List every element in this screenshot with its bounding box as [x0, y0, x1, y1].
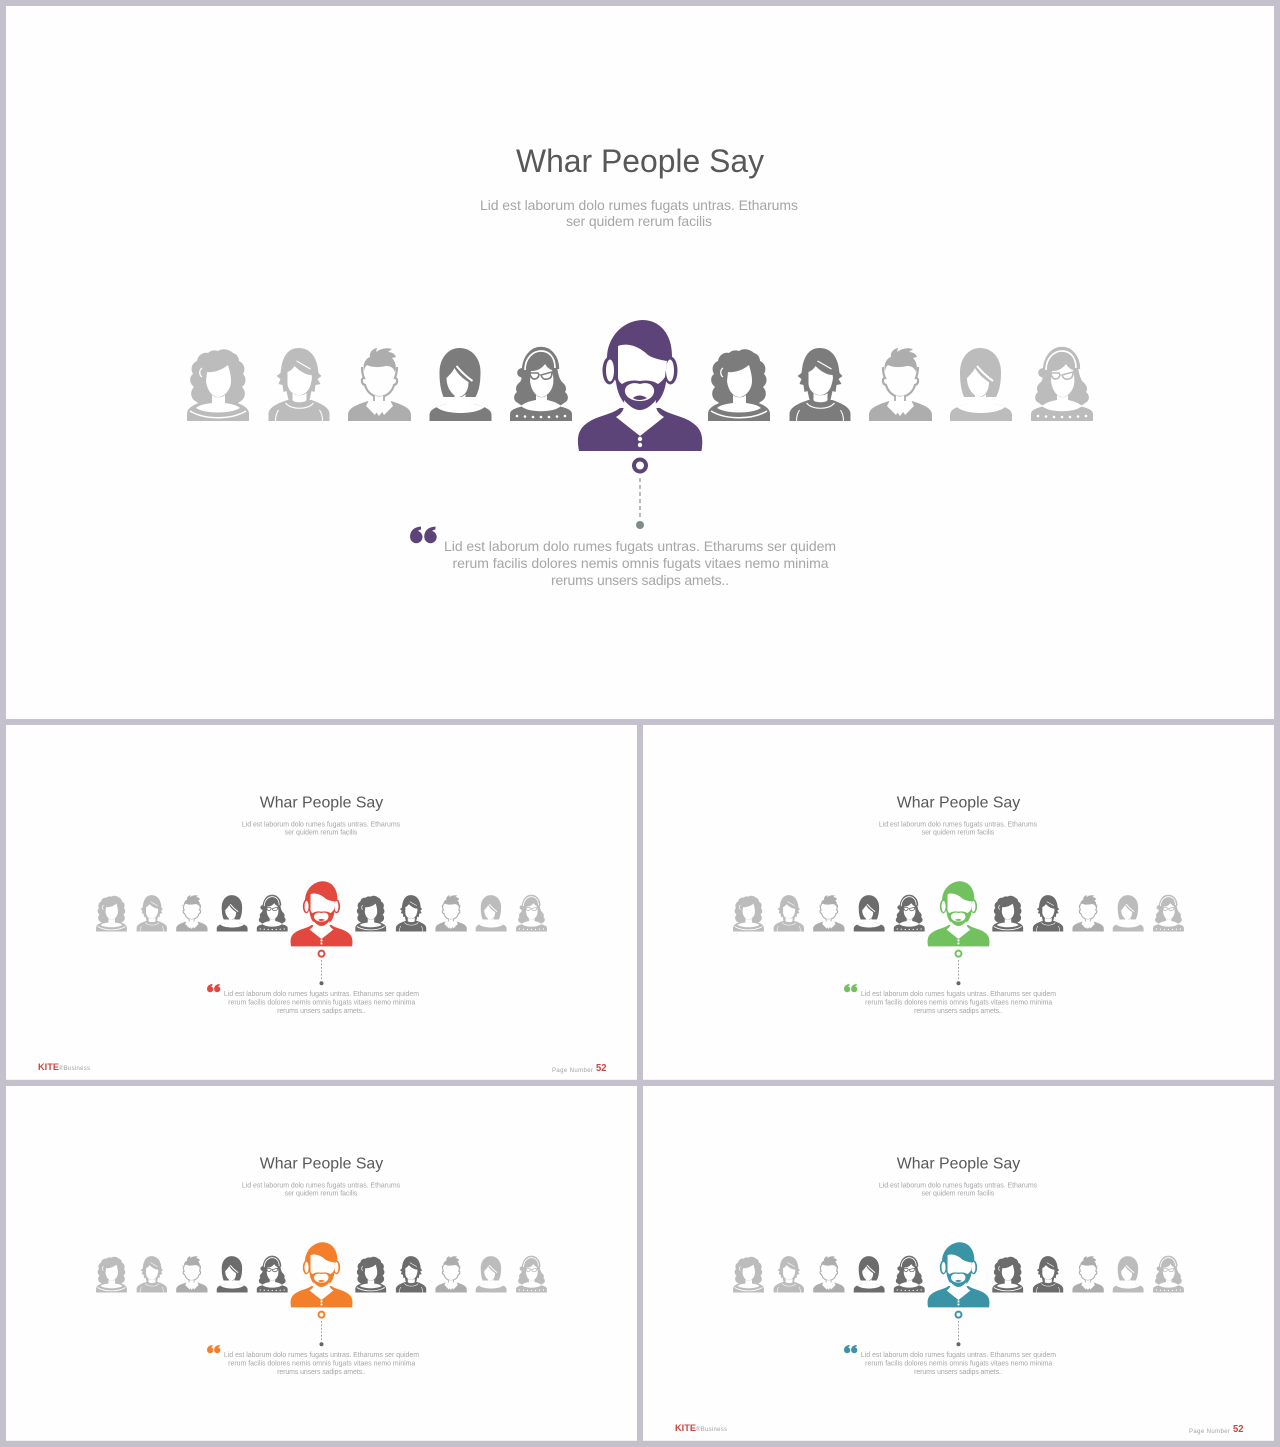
avatar: bearded man highlighted: [291, 881, 352, 946]
icon: quotation mark: [844, 1345, 857, 1353]
avatar: curly hair woman: [187, 349, 249, 421]
avatar: quiff man: [869, 348, 932, 421]
quote text: rerums unsers sadips amets..: [914, 1369, 1003, 1376]
panel: small green slide: [643, 725, 1274, 1080]
quote text: rerums unsers sadips amets..: [277, 1369, 366, 1376]
avatar: spiky hair woman: [1033, 1256, 1063, 1293]
quote text: Lid est laborum dolo rumes fugats untras. Etharums ser quidem: [861, 1352, 1056, 1359]
subtitle: Lid est laborum dolo rumes fugats untras. Etharums: [480, 197, 798, 213]
avatar: woman with glasses: [894, 895, 925, 932]
avatar: woman with glasses: [1153, 895, 1184, 932]
avatar: woman with glasses: [257, 1256, 288, 1293]
avatar: bob hair woman: [217, 1256, 248, 1293]
quote text: rerum facilis dolores nemis omnis fugats vitaes nemo minima: [452, 555, 829, 571]
avatar: quiff man: [435, 895, 467, 932]
footer page number: teal slide: 52: [1233, 1424, 1244, 1435]
avatar: bob hair woman: [476, 1256, 507, 1293]
avatar: woman with glasses: [257, 895, 288, 932]
quote text: rerum facilis dolores nemis omnis fugats vitaes nemo minima: [865, 1361, 1052, 1368]
avatar: bob hair woman: [1113, 1256, 1144, 1293]
panel: small teal slide: [643, 1086, 1274, 1441]
connector: ring, dashed line and dot: [955, 1312, 961, 1346]
subtitle: Lid est laborum dolo rumes fugats untras. Etharums: [879, 822, 1038, 829]
avatar: curly hair woman: [992, 896, 1023, 932]
subtitle: ser quidem rerum facilis: [566, 213, 712, 229]
quote text: rerums unsers sadips amets..: [914, 1008, 1003, 1015]
subtitle: ser quidem rerum facilis: [922, 829, 995, 836]
quote text: [224, 1352, 419, 1376]
icon: quotation mark: [844, 984, 857, 992]
subtitle: Lid est laborum dolo rumes fugats untras. Etharums: [242, 1183, 401, 1190]
footer logo: red slide: [38, 1062, 90, 1073]
avatar: quiff man: [176, 895, 208, 932]
avatar: quiff man: [813, 895, 845, 932]
title: Whar People Say: [897, 1156, 1020, 1173]
quote text: rerum facilis dolores nemis omnis fugats vitaes nemo minima: [228, 1361, 415, 1368]
avatar: woman with glasses: [894, 1256, 925, 1293]
connector: ring, dashed line and dot: [634, 460, 646, 529]
icon: quotation mark: [207, 1345, 220, 1353]
avatar: spiky hair woman: [396, 1256, 426, 1293]
avatar: woman with glasses: [516, 1256, 547, 1293]
title: Whar People Say: [260, 795, 383, 812]
subtitle: [242, 822, 401, 836]
footer logo: teal slide: ®Business: [696, 1426, 727, 1433]
quote text: Lid est laborum dolo rumes fugats untras. Etharums ser quidem: [224, 991, 419, 998]
subtitle: ser quidem rerum facilis: [285, 1190, 358, 1197]
subtitle: Lid est laborum dolo rumes fugats untras. Etharums: [242, 822, 401, 829]
avatar: curly hair woman: [96, 896, 127, 932]
quote text: Lid est laborum dolo rumes fugats untras. Etharums ser quidem: [224, 1352, 419, 1359]
avatar: curly hair woman: [355, 896, 386, 932]
avatar: quiff man: [348, 348, 411, 421]
connector: ring, dashed line and dot: [318, 951, 324, 985]
connector: ring, dashed line and dot: [318, 1312, 324, 1346]
panel: small red slide: [6, 725, 637, 1080]
avatar: quiff man: [176, 1256, 208, 1293]
subtitle: [879, 822, 1038, 836]
avatar: curly hair woman: [733, 1257, 764, 1293]
title: Whar People Say: [260, 1156, 383, 1173]
avatar: bearded man highlighted: [578, 320, 702, 451]
subtitle: [480, 197, 798, 229]
footer logo: red slide: ®Business: [59, 1065, 90, 1072]
avatar: spiky hair woman: [396, 895, 426, 932]
quote text: rerum facilis dolores nemis omnis fugats vitaes nemo minima: [228, 1000, 415, 1007]
avatar: bob hair woman: [854, 895, 885, 932]
avatar: spiky hair woman: [268, 348, 330, 421]
avatar: spiky hair woman: [790, 348, 850, 421]
footer page number: red slide: Page Number: [552, 1068, 593, 1074]
quote text: rerums unsers sadips amets..: [277, 1008, 366, 1015]
avatar: spiky hair woman: [1033, 895, 1063, 932]
subtitle: Lid est laborum dolo rumes fugats untras. Etharums: [879, 1183, 1038, 1190]
quote text: Lid est laborum dolo rumes fugats untras. Etharums ser quidem: [444, 538, 836, 554]
avatar: woman with glasses: [1031, 348, 1093, 421]
avatar: spiky hair woman: [137, 1256, 167, 1293]
avatar: spiky hair woman: [774, 895, 804, 932]
subtitle: ser quidem rerum facilis: [285, 829, 358, 836]
footer page number: teal slide: Page Number: [1189, 1429, 1230, 1435]
subtitle: [242, 1183, 401, 1197]
avatar: quiff man: [813, 1256, 845, 1293]
avatar: quiff man: [1072, 1256, 1104, 1293]
quote text: Lid est laborum dolo rumes fugats untras. Etharums ser quidem: [861, 991, 1056, 998]
avatar: woman with glasses: [1153, 1256, 1184, 1293]
avatar: bearded man highlighted: [928, 1242, 989, 1307]
icon: quotation mark: [207, 984, 220, 992]
avatar: bob hair woman: [950, 348, 1012, 421]
footer logo: red slide: KITE: [38, 1062, 59, 1073]
avatar: bob hair woman: [430, 348, 492, 421]
panel: small orange slide: [6, 1086, 637, 1441]
avatar: spiky hair woman: [137, 895, 167, 932]
quote text: [444, 538, 836, 588]
footer page number: red slide: 52: [596, 1063, 607, 1074]
avatar: bob hair woman: [854, 1256, 885, 1293]
avatar: bearded man highlighted: [291, 1242, 352, 1307]
avatar: quiff man: [435, 1256, 467, 1293]
footer page number: teal slide: [1189, 1424, 1244, 1435]
avatar: curly hair woman: [355, 1257, 386, 1293]
footer logo: teal slide: KITE: [675, 1423, 696, 1434]
avatar: curly hair woman: [708, 349, 770, 421]
subtitle: ser quidem rerum facilis: [922, 1190, 995, 1197]
avatar: spiky hair woman: [774, 1256, 804, 1293]
avatar: curly hair woman: [96, 1257, 127, 1293]
avatar: woman with glasses: [510, 348, 572, 421]
quote text: rerum facilis dolores nemis omnis fugats vitaes nemo minima: [865, 1000, 1052, 1007]
quote text: [861, 991, 1056, 1015]
title: Whar People Say: [897, 795, 1020, 812]
avatar: curly hair woman: [733, 896, 764, 932]
avatar: curly hair woman: [992, 1257, 1023, 1293]
footer logo: teal slide: [675, 1423, 727, 1434]
avatar: quiff man: [1072, 895, 1104, 932]
icon: quotation mark: [410, 526, 437, 543]
footer page number: red slide: [552, 1063, 607, 1074]
subtitle: [879, 1183, 1038, 1197]
avatar: bearded man highlighted: [928, 881, 989, 946]
quote text: [861, 1352, 1056, 1376]
quote text: [224, 991, 419, 1015]
title: Whar People Say: [516, 143, 764, 179]
avatar: bob hair woman: [217, 895, 248, 932]
avatar: bob hair woman: [476, 895, 507, 932]
avatar: woman with glasses: [516, 895, 547, 932]
panel: large purple slide: [6, 6, 1274, 719]
quote text: rerums unsers sadips amets..: [551, 572, 729, 588]
avatar: bob hair woman: [1113, 895, 1144, 932]
connector: ring, dashed line and dot: [955, 951, 961, 985]
